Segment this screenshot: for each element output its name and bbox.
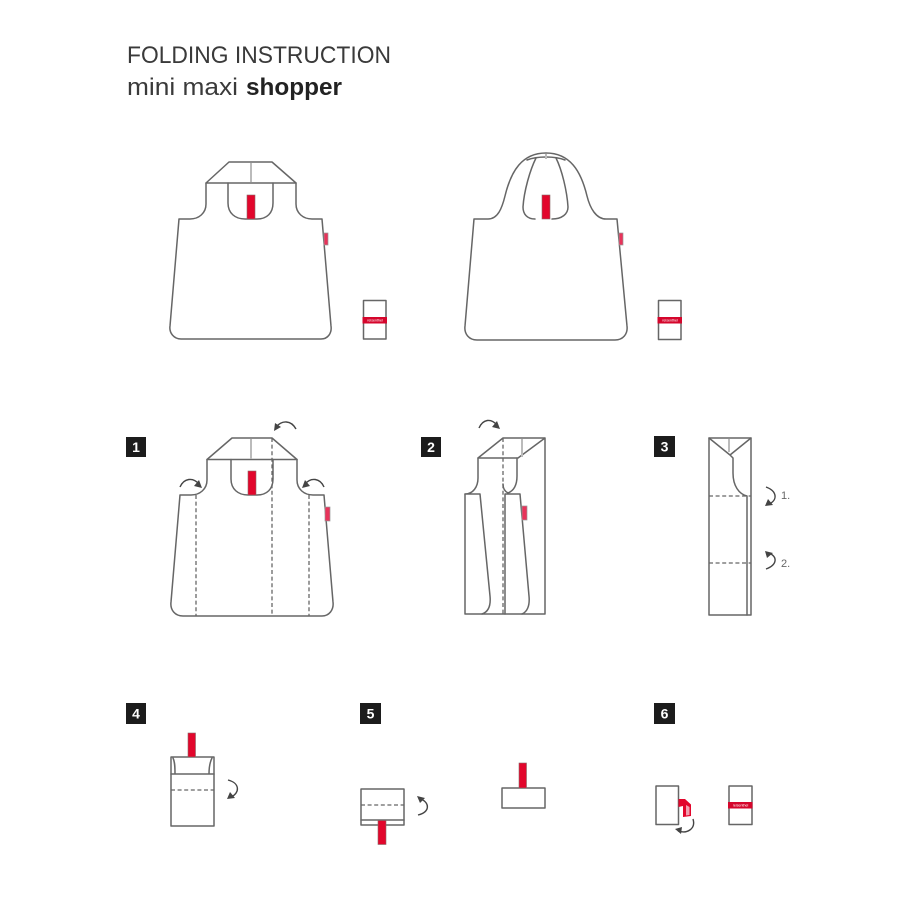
arrow: step 1 right — [302, 479, 324, 488]
step 5 fold B — [502, 763, 545, 808]
icon: side tag — [522, 506, 527, 520]
icon: red strap — [519, 763, 526, 788]
step 4 badge — [126, 703, 146, 724]
step 1 bag — [171, 438, 333, 616]
step 5 badge: 5 — [367, 706, 375, 722]
step 2 badge: 2 — [427, 439, 435, 455]
step 2 badge — [421, 437, 441, 457]
step 3 badge: 3 — [661, 438, 669, 454]
arrow: step 5 — [417, 796, 427, 815]
title: mini maxi — [127, 74, 238, 101]
icon: side tag — [325, 507, 330, 521]
icon: red strap — [378, 820, 386, 844]
bag: flat handle version — [170, 162, 331, 339]
title: FOLDING INSTRUCTION — [127, 42, 391, 69]
step 1 badge: 1 — [132, 439, 140, 455]
step 2 bag — [465, 438, 545, 614]
step 3 badge — [654, 436, 675, 457]
arrow: step 3 fold 2 — [765, 551, 775, 569]
step 5 badge — [360, 703, 381, 724]
arrow: step 1 left — [180, 479, 202, 488]
title: shopper — [246, 74, 342, 101]
label: 1.: 1. — [781, 490, 790, 502]
step 4 folded bag — [171, 733, 214, 826]
folded pouch 2: reisenthel — [662, 318, 678, 322]
step 6 badge — [654, 703, 675, 724]
step 6 pouch with band wrapping — [656, 786, 691, 824]
icon: side tag — [619, 233, 623, 245]
folded pouch 1 — [362, 300, 387, 339]
folded pouch 1: reisenthel — [367, 318, 383, 322]
icon: red strap — [188, 733, 196, 757]
step 4 badge: 4 — [132, 706, 140, 722]
icon: side tag — [324, 233, 328, 245]
arrow: step 4 — [227, 780, 237, 799]
step 1 badge — [126, 437, 146, 457]
step 3 folded strip — [709, 438, 751, 615]
label: 2.: 2. — [781, 558, 790, 570]
icon: red strap — [248, 471, 256, 495]
arrow: step 3 fold 1 — [765, 487, 775, 506]
icon: red strap — [247, 195, 255, 219]
title — [127, 42, 391, 101]
icon: red strap — [542, 195, 550, 219]
arrow: step 1 top — [274, 422, 296, 431]
bag: round handle version — [465, 153, 627, 340]
step 6 finished pouch — [728, 786, 752, 824]
arrow: step 2 — [479, 420, 500, 429]
step 6 badge: 6 — [661, 706, 669, 722]
folded pouch 2 — [658, 300, 682, 340]
step 6 finished pouch: reisenthel — [733, 804, 748, 808]
step 5 fold A — [361, 789, 404, 844]
arrow: step 6 — [675, 819, 694, 834]
